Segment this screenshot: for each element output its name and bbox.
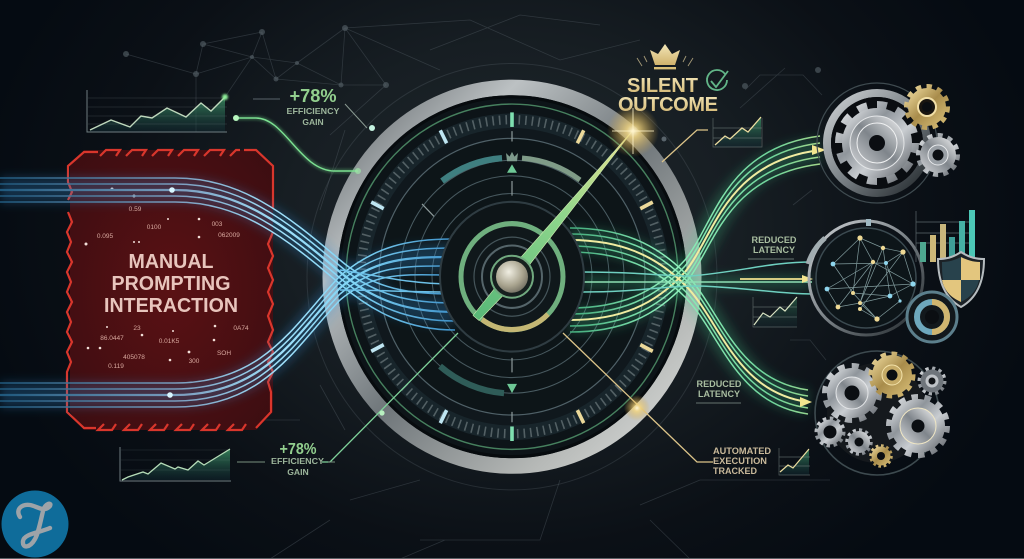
- panel data fragments: [97, 206, 249, 370]
- panel body: [70, 150, 273, 430]
- panel data fragments: 23: [133, 325, 141, 332]
- crown: [637, 44, 693, 69]
- callout: top efficiency gain: GAIN: [302, 117, 324, 127]
- label: reduced latency upper: REDUCED: [752, 235, 796, 245]
- blue data streams: [0, 178, 455, 407]
- chart: execution: [779, 448, 810, 475]
- sparkle: needle tip: [607, 105, 659, 157]
- green data streams: [570, 136, 826, 414]
- tick ring: [361, 120, 663, 434]
- panel data fragments: SOH: [217, 350, 231, 357]
- panel data fragments: 86.0447: [100, 335, 124, 342]
- panel data fragments: 300: [189, 358, 200, 365]
- callout: top efficiency gain: +78%: [290, 86, 336, 106]
- main gear: [839, 105, 915, 181]
- leader: gold lower-right: [563, 333, 713, 462]
- label: reduced latency lower: REDUCED: [696, 379, 742, 389]
- gear: gold small: [871, 446, 891, 466]
- stream arrowheads: [800, 145, 826, 407]
- panel data fragments: 003: [212, 221, 223, 228]
- panel data fragments: 0.119: [108, 363, 124, 370]
- label: reduced latency lower: LATENCY: [698, 389, 740, 399]
- label: reduced latency lower: [696, 379, 742, 403]
- callout: top efficiency gain: [286, 86, 340, 127]
- small gear: [918, 136, 958, 174]
- panel title: MANUAL: [128, 251, 214, 273]
- dial crown marker: [506, 152, 518, 161]
- label: reduced latency upper: LATENCY: [753, 245, 795, 255]
- gear: large left: [825, 366, 879, 420]
- gear: small dark: [920, 368, 944, 394]
- centre ring: [461, 224, 563, 330]
- gear: big right: [889, 397, 947, 455]
- panel data fragments: 0.59: [129, 206, 142, 213]
- panel: manual prompting: [67, 150, 273, 430]
- panel title: INTERACTION: [104, 295, 238, 317]
- leader: gold top-right: [662, 130, 708, 162]
- hub: [491, 256, 533, 298]
- heading: silent outcome: SILENT: [627, 75, 698, 97]
- sparkle: gold leader: [624, 395, 650, 421]
- icon: check badge: [707, 70, 728, 90]
- callout: top efficiency gain: EFFICIENCY: [286, 106, 340, 116]
- chart: outcome: [713, 117, 762, 147]
- gear frame: [817, 83, 937, 203]
- label: reduced latency upper: [748, 235, 796, 259]
- label: automated execution tracked: [713, 446, 772, 476]
- panel data fragments: 405078: [123, 354, 145, 361]
- needle: [473, 129, 634, 320]
- network nodes: [825, 235, 916, 322]
- gear: gold large: [871, 354, 913, 396]
- gear: lower-mid: [847, 430, 871, 454]
- metal rim: [330, 87, 694, 466]
- callout: bottom efficiency gain: +78%: [280, 441, 317, 458]
- callout: bottom efficiency gain: GAIN: [287, 467, 309, 477]
- chart: bottom-left growth: [120, 447, 231, 481]
- callout: bottom efficiency gain: EFFICIENCY: [271, 456, 324, 466]
- chart: top-left growth: [87, 90, 228, 132]
- network edges: [827, 238, 913, 319]
- icon: shield: [938, 252, 984, 307]
- panel title: PROMPTING: [112, 273, 230, 295]
- dial outer faint rings: [307, 64, 717, 490]
- gold gear: [906, 86, 948, 128]
- icon: ring dial: [907, 292, 957, 342]
- dial: [307, 64, 717, 490]
- gears: top cluster: [817, 83, 958, 203]
- leader: green efficiency: [233, 99, 375, 174]
- chart: latency: [753, 297, 797, 327]
- panel data fragments: 0100: [147, 224, 162, 231]
- network globe: [808, 219, 923, 335]
- label: automated execution tracked: EXECUTION: [713, 456, 767, 466]
- callout: bottom efficiency gain: [237, 441, 335, 477]
- dial triangles: [507, 164, 517, 393]
- gear: lower-left: [816, 418, 844, 446]
- dial centre: [440, 202, 584, 352]
- leader: green lower-left: [322, 333, 458, 462]
- heading: silent outcome: [618, 75, 718, 116]
- panel jagged border: [67, 150, 273, 430]
- heading: silent outcome: OUTCOME: [618, 94, 718, 116]
- logo: [2, 490, 68, 558]
- label: automated execution tracked: TRACKED: [713, 466, 757, 476]
- panel title: [104, 251, 238, 317]
- panel data fragments: 062009: [218, 232, 240, 239]
- bar chart: [916, 210, 975, 262]
- panel data fragments: 0.01K5: [159, 338, 180, 345]
- panel data fragments: 0A74: [233, 325, 249, 332]
- gears: bottom cluster: [815, 351, 947, 475]
- major ticks: [370, 112, 654, 441]
- label: automated execution tracked: AUTOMATED: [713, 446, 772, 456]
- green status arc: [346, 104, 678, 449]
- background network lines: [123, 15, 830, 559]
- panel data fragments: 0.095: [97, 233, 114, 240]
- coloured arcs: [442, 158, 502, 181]
- panel dots: [84, 188, 216, 361]
